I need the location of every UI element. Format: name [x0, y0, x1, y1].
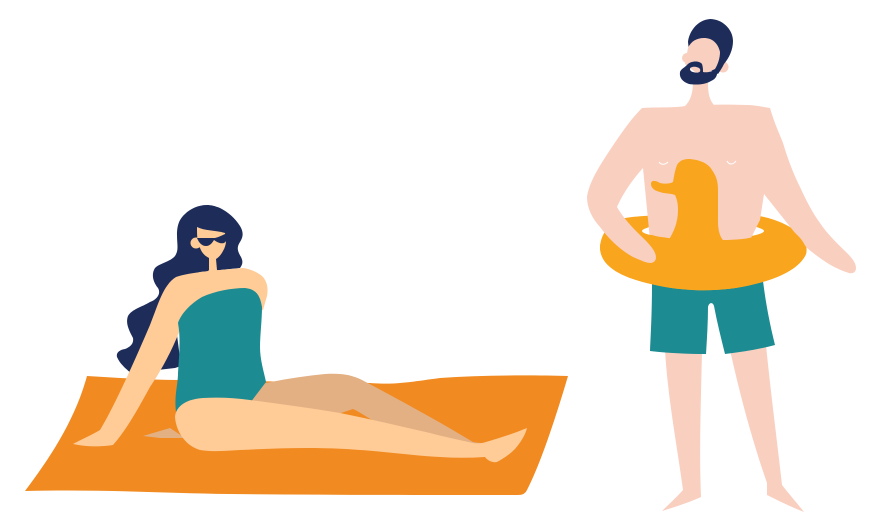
- man nose: [682, 53, 692, 63]
- woman arm and shoulders: [73, 268, 268, 446]
- woman: [73, 205, 527, 462]
- ring hole: [642, 223, 764, 239]
- towel shadow under hip: [143, 428, 185, 438]
- towel: [25, 375, 568, 495]
- ring front: [600, 229, 806, 290]
- man hair: [688, 19, 733, 74]
- nipple right: [727, 161, 736, 164]
- man face: [685, 38, 720, 76]
- ring back: [600, 214, 807, 290]
- nipple left: [659, 162, 668, 164]
- swimsuit: [175, 288, 266, 412]
- man neck: [684, 80, 716, 107]
- sunglasses: [197, 233, 227, 246]
- man right leg: [730, 345, 804, 512]
- man left arm: [587, 108, 660, 263]
- woman hair: [117, 205, 243, 373]
- man beard: [680, 61, 717, 85]
- man torso and right arm: [620, 105, 856, 273]
- rubber duck head: [651, 159, 724, 241]
- near leg: [175, 398, 527, 462]
- swim shorts: [650, 281, 775, 354]
- man left leg: [662, 350, 702, 511]
- man ear: [718, 62, 728, 72]
- woman ear: [190, 238, 202, 248]
- far leg: [250, 374, 513, 454]
- man: [587, 19, 856, 512]
- woman neck and face: [197, 227, 226, 274]
